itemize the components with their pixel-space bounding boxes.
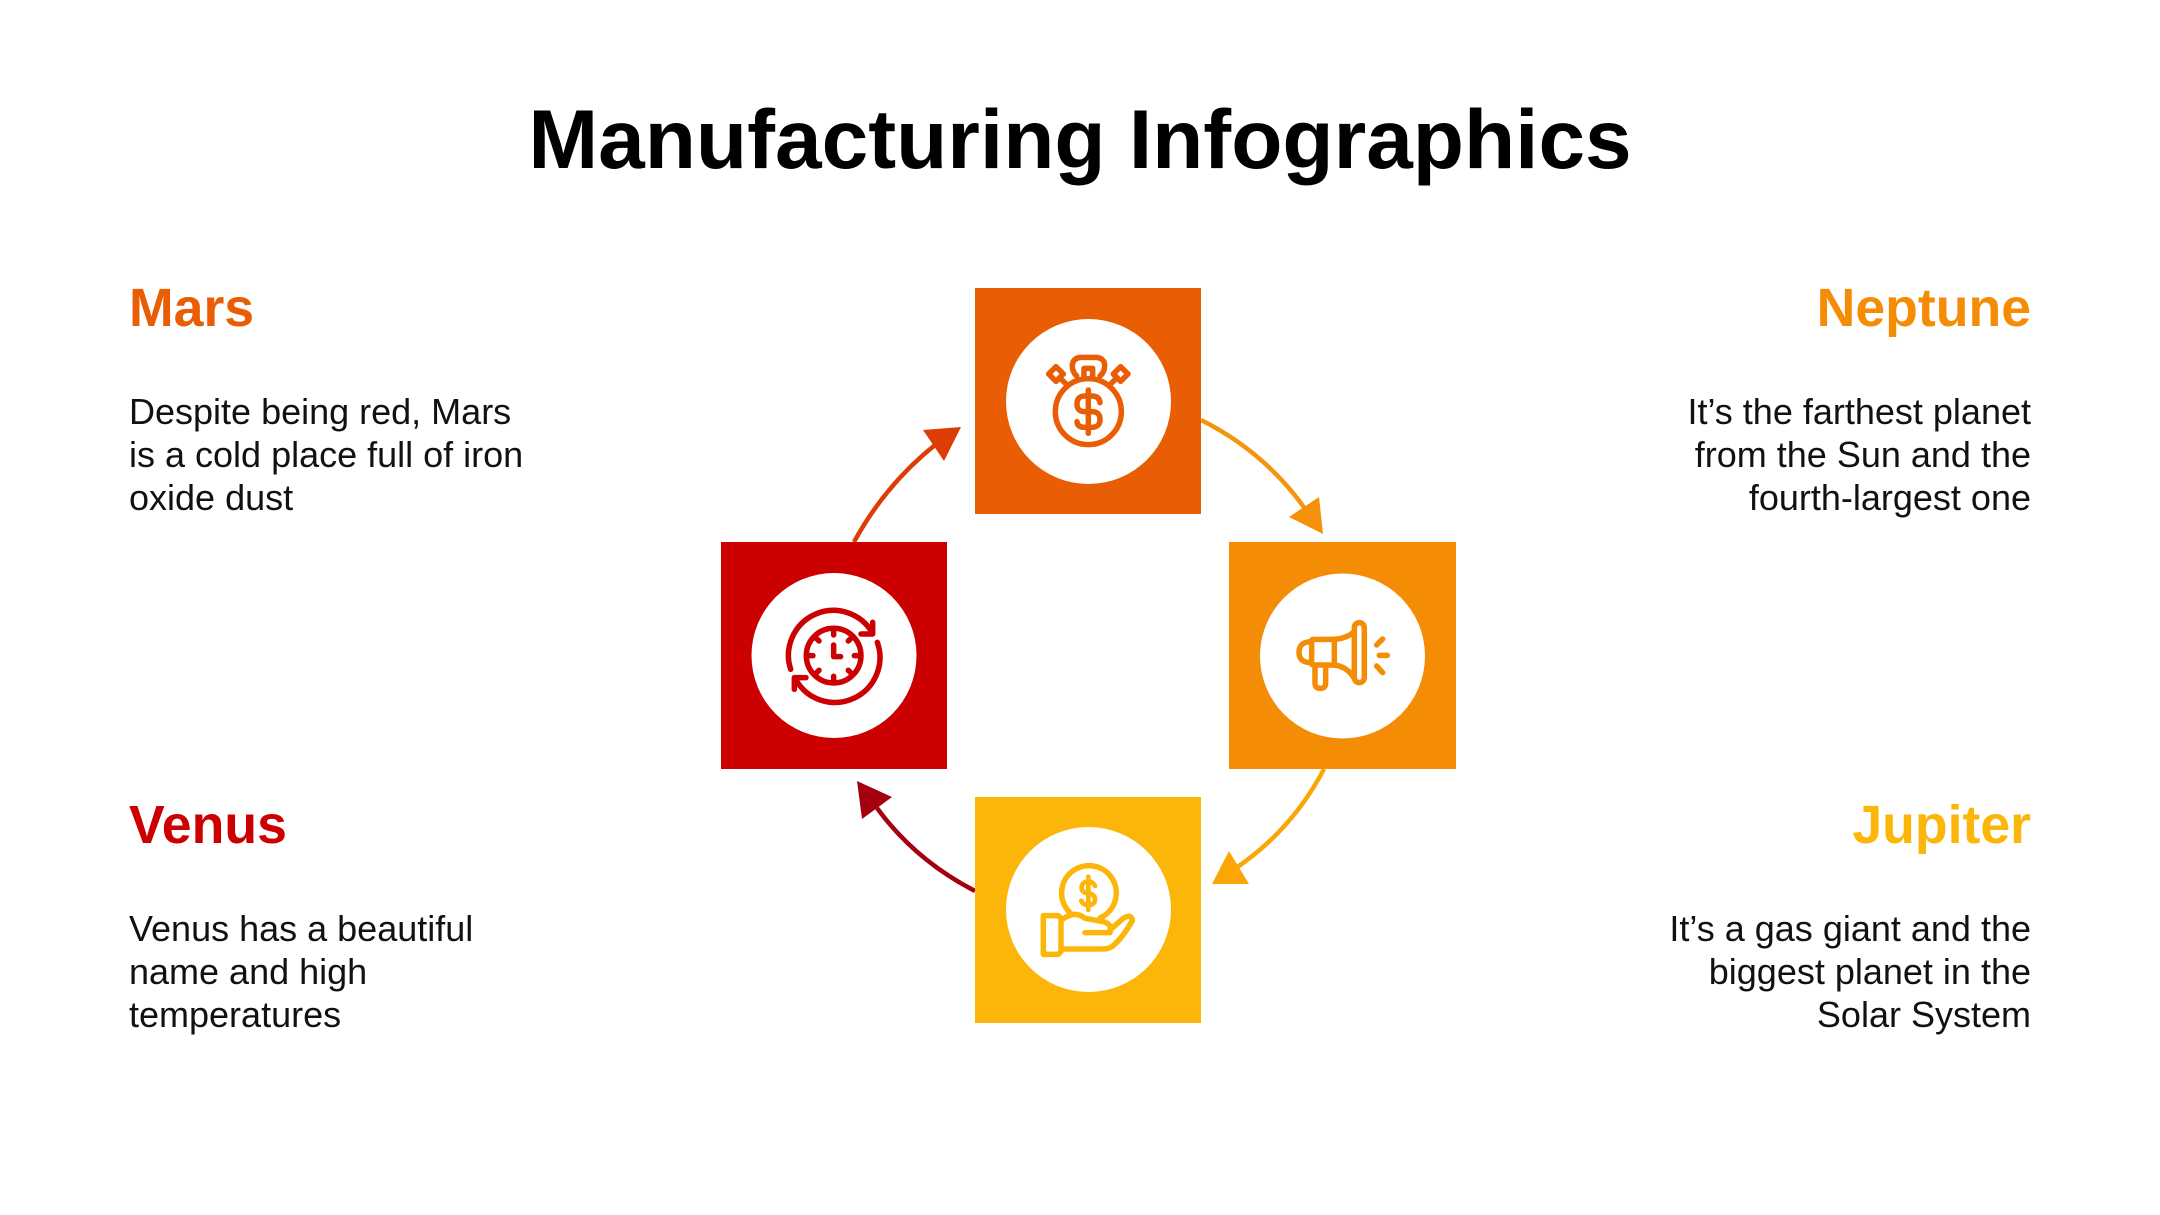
- panel: Venus text: [129, 795, 473, 1035]
- text block: Mars description: is a cold place full of iron: [129, 434, 523, 475]
- panel: right square with megaphone icon: [1229, 542, 1456, 769]
- text block: Neptune description: fourth-largest one: [1749, 477, 2031, 518]
- text block: Mars description: Despite being red, Mars: [129, 391, 511, 432]
- text block: Venus description: Venus has a beautiful: [129, 908, 473, 949]
- title: Manufacturing Infographics: [528, 92, 1632, 186]
- arrow: left to top: [854, 427, 961, 542]
- icon: hand holding coin: [1043, 866, 1132, 954]
- text block: Neptune description: from the Sun and the: [1695, 434, 2031, 475]
- panel: Mars text: [129, 278, 523, 518]
- icon: money stopwatch: [1049, 357, 1128, 445]
- heading: Venus: Venus: [129, 795, 287, 855]
- panel: top square with stopwatch icon: [975, 288, 1201, 514]
- text block: Venus description: name and high: [129, 951, 367, 992]
- icon: megaphone: [1299, 623, 1387, 688]
- panel: Neptune text: [1687, 278, 2031, 518]
- heading: Neptune: Neptune: [1817, 278, 2031, 338]
- text block: Jupiter description: It’s a gas giant and the: [1669, 908, 2031, 949]
- arrow: top to right: [1201, 420, 1323, 534]
- heading: Mars: Mars: [129, 278, 254, 338]
- arrow: right to bottom: [1212, 769, 1324, 884]
- text block: Neptune description: It’s the farthest planet: [1687, 391, 2031, 432]
- icon: clock with circular arrows: [788, 610, 880, 702]
- arrow: bottom to left: [857, 781, 975, 891]
- text block: Jupiter description: Solar System: [1817, 994, 2031, 1035]
- panel: bottom square with hand and coin icon: [975, 797, 1201, 1023]
- panel: Jupiter text: [1669, 795, 2031, 1035]
- panel: left square with clock icon: [721, 542, 947, 769]
- text block: Mars description: oxide dust: [129, 477, 293, 518]
- heading: Jupiter: Jupiter: [1852, 795, 2031, 855]
- text block: Venus description: temperatures: [129, 994, 341, 1035]
- text block: Jupiter description: biggest planet in the: [1709, 951, 2031, 992]
